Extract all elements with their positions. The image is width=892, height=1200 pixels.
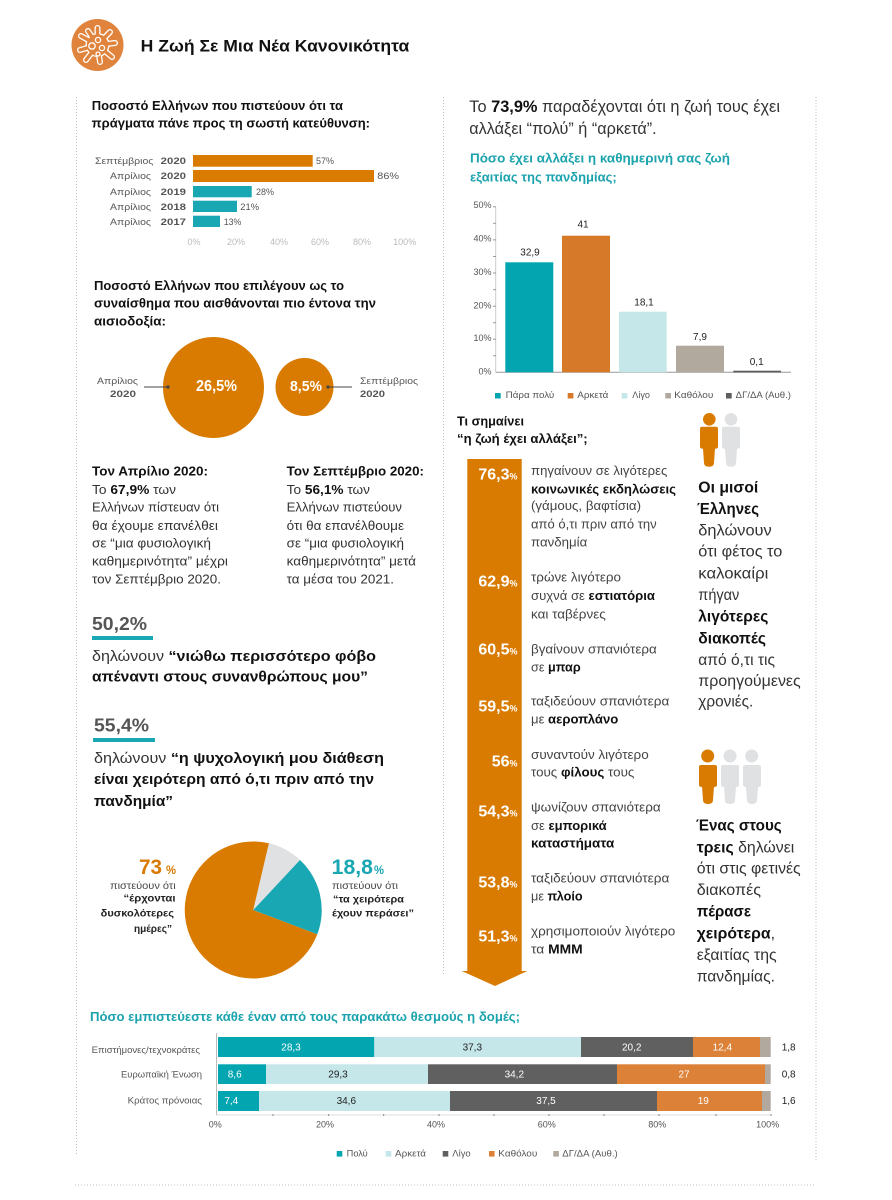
bubble: April 2020 — [163, 337, 264, 438]
row: welfare state: Κράτος πρόνοιας — [128, 1096, 202, 1107]
axis: 0% — [478, 366, 492, 376]
arrow: percentages: 51,3% — [478, 929, 518, 946]
text block: public transport: χρησιμοποιούν λιγότερο — [531, 925, 675, 939]
stat: 55,4% mood: δηλώνουν “η ψυχολογική μου διάθεση — [94, 750, 384, 767]
heading: right direction — [92, 98, 370, 131]
bar: September 2020: 57% — [316, 156, 335, 167]
bar: April 2018 — [110, 201, 260, 213]
text block: restaurants: συχνά σε εστιατόρια — [531, 589, 655, 603]
text block: April 2020 — [92, 464, 228, 586]
icon: three people — [699, 750, 761, 804]
pie label: 73%: πιστεύουν ότι — [110, 880, 176, 892]
row: scientists: 28,3 — [281, 1043, 301, 1054]
text block: friends — [531, 748, 649, 780]
text block: public transport — [531, 925, 675, 956]
stat: 50,2% fear: δηλώνουν “νιώθω περισσότερο φόβο — [92, 648, 376, 665]
text block: one in three: πέρασε — [697, 904, 751, 921]
heading: trust in institutions: Πόσο εμπιστεύεστε κάθε έναν από τους παρακάτω θεσμούς η δομές; — [90, 1009, 520, 1024]
stat: 50,2% fear — [92, 614, 376, 686]
heading: what life changed means: “η ζωή έχει αλλάξει”; — [457, 431, 588, 446]
bar: April 2020: 2020 — [161, 171, 186, 182]
text block: social events — [531, 464, 676, 550]
text block: half of Greeks: δηλώνουν — [698, 523, 772, 540]
text block: April 2020: θα έχουμε επανέλθει — [92, 518, 218, 533]
pie label: 18,8%: πιστεύουν ότι — [332, 880, 398, 892]
axis labels: 20% — [227, 237, 245, 247]
text block: airplane: ταξιδεύουν σπανιότερα — [531, 695, 669, 709]
axis: 40% — [427, 1119, 445, 1129]
bubble: September 2020 — [276, 358, 334, 416]
heading: optimism: Ποσοστό Ελλήνων που επιλέγουν ως το — [94, 278, 344, 293]
row: European Union: 29,3 — [328, 1070, 348, 1081]
row: European Union: 0,8 — [782, 1070, 796, 1081]
pie label: 18,8% — [332, 856, 414, 920]
text block: half of Greeks: Έλληνες — [697, 501, 759, 518]
pie label: 73%: ημέρες” — [134, 924, 172, 935]
text block: ship: ταξιδεύουν σπανιότερα — [531, 872, 669, 886]
text block: friends: τους φίλους τους — [531, 766, 634, 780]
bar: April 2018: 2018 — [161, 202, 186, 213]
pie label: 73%: δυσκολότερες — [101, 909, 174, 920]
pie label: 73%: 73 — [139, 856, 162, 879]
text block: April 2020: καθημερινότητα” μέχρι — [92, 554, 228, 569]
row: scientists: 20,2 — [622, 1043, 642, 1054]
axis labels — [187, 237, 416, 247]
row: scientists — [92, 1037, 796, 1057]
text block: September 2020: ότι θα επανέλθουμε — [287, 518, 404, 533]
row: scientists: Επιστήμονες/τεχνοκράτες — [92, 1045, 200, 1056]
title: Η Ζωή Σε Μια Νέα Κανονικότητα — [141, 37, 410, 56]
legend: ΔΓ/ΔΑ (Αυθ.) — [562, 1149, 618, 1159]
heading: optimism: αισιοδοξία: — [94, 314, 166, 329]
text block: shops — [531, 801, 661, 851]
arrow: percentages: 54,3% — [478, 804, 518, 821]
bar chart: daily life change — [473, 200, 791, 400]
heading: right direction: Ποσοστό Ελλήνων που πιστεύουν ότι τα — [92, 98, 343, 113]
text block: one in three — [696, 818, 801, 986]
text block: restaurants: και ταβέρνες — [531, 607, 606, 621]
text block: shops: σε εμπορικά — [531, 819, 607, 833]
text block: bars: βγαίνουν σπανιότερα — [531, 642, 657, 656]
bubble: September 2020: 8,5% — [290, 378, 322, 395]
arrow: percentages: 62,9% — [478, 574, 518, 591]
icon: two people — [700, 413, 740, 467]
value labels: 18,1 — [634, 298, 654, 309]
legend: Καθόλου — [498, 1149, 537, 1159]
axis labels: 80% — [353, 237, 371, 247]
axis — [473, 200, 791, 376]
axis labels: 40% — [270, 237, 288, 247]
bar: April 2017: Απρίλιος — [110, 217, 151, 228]
text block: half of Greeks: καλοκαίρι — [698, 565, 769, 582]
text block: one in three: διακοπές — [697, 882, 761, 899]
legend: Λίγο — [632, 390, 650, 400]
bar: April 2020: 86% — [377, 171, 400, 182]
row: welfare state: 19 — [698, 1096, 709, 1107]
value labels — [520, 220, 764, 368]
text block: ship — [531, 872, 669, 904]
arrow: percentages — [462, 459, 527, 986]
arrow: percentages: 56% — [492, 754, 518, 771]
text block: one in three: εξαιτίας της — [697, 947, 777, 964]
axis: 0% — [209, 1119, 222, 1129]
text block: 73,9% intro: αλλάξει “πολύ” ή “αρκετά”. — [469, 120, 657, 138]
row: welfare state: 37,5 — [536, 1096, 556, 1107]
text block: one in three: πανδημίας. — [697, 969, 775, 986]
bar: April 2019: 28% — [256, 187, 275, 198]
text block: half of Greeks — [697, 479, 801, 711]
text block: half of Greeks: πήγαν — [698, 587, 739, 604]
row: welfare state: 7,4 — [224, 1096, 239, 1107]
bar: April 2017 — [110, 216, 242, 228]
row: scientists: 1,8 — [782, 1043, 796, 1054]
text block: shops: ψωνίζουν σπανιότερα — [531, 801, 661, 815]
axis labels: 100% — [393, 237, 416, 247]
heading: what life changed means: Τι σημαίνει — [457, 414, 524, 429]
stat: 55,4% mood: είναι χειρότερη από ό,τι πριν από την — [94, 771, 374, 788]
axis: 10% — [473, 333, 492, 343]
axis: 50% — [473, 200, 492, 210]
axis — [209, 1033, 779, 1129]
callout: April 2020 — [97, 376, 170, 400]
row: European Union — [121, 1064, 796, 1084]
heading: optimism — [94, 278, 376, 329]
heading: optimism: συναίσθημα που αισθάνονται πιο έντονα την — [94, 296, 376, 311]
axis: 30% — [473, 267, 492, 277]
text block: 73,9% intro — [469, 98, 780, 138]
axis: 20% — [473, 300, 492, 310]
stat: 50,2% fear: 50,2% — [92, 614, 147, 634]
text block: September 2020: Ελλήνων πιστεύουν — [287, 500, 402, 515]
text block: social events: πανδημία — [531, 536, 587, 550]
text block: September 2020: Το 56,1% των — [287, 482, 370, 497]
bar: April 2017: 13% — [224, 217, 242, 228]
text block: social events: από ό,τι πριν από την — [531, 517, 657, 531]
heading: what life changed means — [457, 414, 588, 446]
bar: September 2020 — [95, 155, 335, 167]
text block: September 2020: Τον Σεπτέμβριο 2020: — [287, 464, 424, 479]
row: European Union: 34,2 — [505, 1070, 524, 1081]
text block: restaurants: τρώνε λιγότερο — [531, 571, 621, 585]
stat: 55,4% mood — [93, 716, 384, 810]
arrow: percentages: 60,5% — [478, 641, 518, 658]
callout: April 2020: Απρίλιος — [97, 376, 138, 387]
value labels: 32,9 — [520, 248, 540, 259]
axis: 20% — [316, 1119, 334, 1129]
callout: September 2020 — [326, 376, 418, 400]
text block: half of Greeks: χρονιές. — [698, 694, 753, 711]
text block: restaurants — [531, 571, 655, 621]
callout: September 2020: Σεπτέμβριος — [360, 376, 418, 387]
panel: right direction bar chart — [92, 98, 416, 247]
legend — [337, 1149, 618, 1159]
callout: September 2020: 2020 — [360, 389, 385, 400]
bar: April 2018: Απρίλιος — [110, 202, 151, 213]
legend — [495, 390, 791, 400]
pie label: 73%: % — [166, 863, 176, 877]
text block: April 2020: Ελλήνων πίστευαν ότι — [92, 500, 219, 515]
text block: airplane — [531, 695, 669, 726]
axis: 60% — [538, 1119, 556, 1129]
arrow: percentages: 53,8% — [478, 874, 518, 891]
legend: Πάρα πολύ — [506, 390, 554, 400]
text block: half of Greeks: Οι μισοί — [698, 479, 758, 496]
bar: April 2018: 21% — [240, 202, 260, 213]
bar: April 2019: 2019 — [161, 187, 186, 198]
text block: one in three: χειρότερα, — [697, 925, 775, 942]
icon: virus logo — [72, 19, 124, 71]
row: welfare state: 1,6 — [782, 1096, 796, 1107]
legend: ΔΓ/ΔΑ (Αυθ.) — [736, 390, 791, 400]
bar: April 2019: Απρίλιος — [110, 187, 151, 198]
text block: social events: πηγαίνουν σε λιγότερες — [531, 464, 667, 478]
pie chart — [185, 841, 322, 978]
text block: April 2020: Το 67,9% των — [92, 482, 176, 497]
text block: April 2020: τον Σεπτέμβριο 2020. — [92, 571, 221, 586]
text block: September 2020: σε “μια φυσιολογική — [287, 536, 404, 551]
pie label: 73%: “έρχονται — [124, 894, 176, 905]
legend: Αρκετά — [395, 1149, 426, 1159]
bubble: April 2020: 26,5% — [196, 378, 237, 395]
value labels: 7,9 — [693, 332, 707, 343]
text block: one in three: ότι στις φετινές — [697, 860, 801, 877]
heading: daily life change — [470, 151, 730, 185]
text block: social events: κοινωνικές εκδηλώσεις — [531, 482, 676, 496]
pie label: 18,8%: % — [374, 863, 384, 877]
text block: ship: με πλοίο — [531, 890, 583, 904]
row: scientists: 37,3 — [463, 1043, 482, 1054]
text block: one in three: Ένας στους — [696, 818, 782, 835]
text block: half of Greeks: διακοπές — [698, 630, 766, 647]
legend: Καθόλου — [674, 390, 713, 400]
bars — [505, 236, 781, 372]
text block: half of Greeks: από ό,τι τις — [698, 652, 775, 669]
axis labels: 60% — [311, 237, 329, 247]
row: European Union: 8,6 — [228, 1070, 242, 1081]
pie label: 18,8%: 18,8 — [332, 856, 373, 879]
pie label: 18,8%: έχουν περάσει” — [332, 909, 414, 920]
text block: bars — [531, 642, 657, 675]
bar: September 2020: Σεπτέμβριος — [95, 156, 154, 167]
heading: right direction: πράγματα πάνε προς τη σωστή κατεύθυνση: — [92, 116, 370, 131]
text block: half of Greeks: λιγότερες — [698, 609, 768, 626]
stacked bar chart: trust — [92, 1033, 796, 1159]
bar: April 2020 — [110, 170, 400, 182]
text block: September 2020: τα μέσα του 2021. — [287, 571, 394, 586]
legend: Λίγο — [452, 1149, 471, 1159]
stat: 55,4% mood: 55,4% — [94, 716, 149, 736]
bar: April 2017: 2017 — [161, 217, 186, 228]
row: European Union: Ευρωπαϊκή Ένωση — [121, 1070, 202, 1081]
text block: April 2020: Τον Απρίλιο 2020: — [92, 464, 208, 479]
text block: September 2020: καθημερινότητα” μετά — [287, 554, 416, 569]
text block: 73,9% intro: Το 73,9% παραδέχονται ότι η ζωή τους έχει — [469, 98, 780, 116]
axis: 80% — [648, 1119, 666, 1129]
stat: 50,2% fear: απέναντι στους συνανθρώπους μου” — [92, 669, 368, 686]
stat: 55,4% mood: πανδημία” — [94, 793, 173, 810]
row: scientists: 12,4 — [713, 1043, 732, 1054]
bar: April 2019 — [110, 186, 275, 198]
text block: public transport: τα ΜΜΜ — [531, 942, 583, 956]
row: welfare state: 34,6 — [337, 1096, 356, 1107]
bar: April 2020: Απρίλιος — [110, 171, 151, 182]
text block: shops: καταστήματα — [531, 837, 615, 851]
callout: April 2020: 2020 — [110, 389, 136, 400]
text block: September 2020 — [287, 464, 424, 586]
pie label: 73% — [101, 856, 176, 935]
bar: September 2020: 2020 — [161, 156, 186, 167]
axis: 40% — [473, 234, 492, 244]
arrow: percentages: 59,5% — [478, 699, 518, 716]
axis labels: 0% — [187, 237, 201, 247]
text block: half of Greeks: προηγούμενες — [698, 673, 801, 690]
heading: daily life change: εξαιτίας της πανδημίας; — [470, 170, 617, 185]
panel: optimism bubbles — [94, 278, 418, 438]
value labels: 41 — [577, 220, 589, 231]
row: welfare state — [128, 1091, 796, 1111]
text block: social events: (γάμους, βαφτίσια) — [531, 499, 641, 513]
arrow: percentages: 76,3% — [478, 466, 518, 483]
text block: one in three: τρεις δηλώνει — [697, 839, 795, 856]
legend: Πολύ — [347, 1149, 368, 1159]
legend: Αρκετά — [577, 390, 608, 400]
axis: 100% — [756, 1119, 779, 1129]
row: European Union: 27 — [678, 1070, 690, 1081]
text block: half of Greeks: ότι φέτος το — [698, 544, 782, 561]
heading: daily life change: Πόσο έχει αλλάξει η καθημερινή σας ζωή — [470, 151, 730, 166]
pie label: 18,8%: “τα χειρότερα — [333, 895, 405, 906]
text block: April 2020: σε “μια φυσιολογική — [92, 536, 211, 551]
text block: airplane: με αεροπλάνο — [531, 712, 619, 726]
value labels: 0,1 — [750, 357, 764, 368]
text block: bars: σε μπαρ — [531, 661, 581, 675]
text block: friends: συναντούν λιγότερο — [531, 748, 649, 762]
